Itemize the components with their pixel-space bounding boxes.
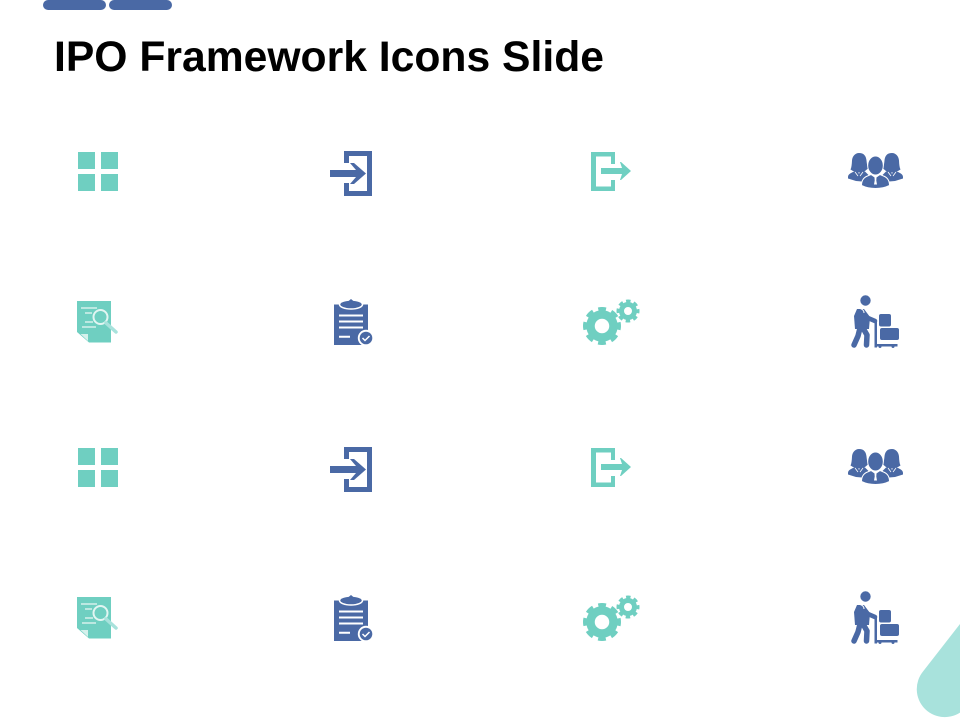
icon: worker r4 xyxy=(854,591,899,644)
icon: clipboard r4 xyxy=(334,595,374,642)
icon: clipboard r2 xyxy=(334,299,374,346)
icon: enter r1 xyxy=(330,151,372,196)
corner drop xyxy=(917,624,960,717)
decorative pills xyxy=(43,0,172,10)
icon: grid r3 xyxy=(78,448,118,487)
icon: gears r4 xyxy=(586,597,638,638)
icon: gears r2 xyxy=(586,301,638,342)
icon: people r3 xyxy=(848,449,903,484)
icon: worker r2 xyxy=(854,295,899,348)
icon: document search r4 xyxy=(77,597,116,638)
icon: enter r3 xyxy=(330,447,372,492)
icon: people r1 xyxy=(848,153,903,188)
icon: exit r1 xyxy=(591,152,631,191)
title: IPO Framework Icons Slide xyxy=(54,33,604,81)
icon: document search r2 xyxy=(77,301,116,342)
icon: grid r1 xyxy=(78,152,118,191)
icon: exit r3 xyxy=(591,448,631,487)
